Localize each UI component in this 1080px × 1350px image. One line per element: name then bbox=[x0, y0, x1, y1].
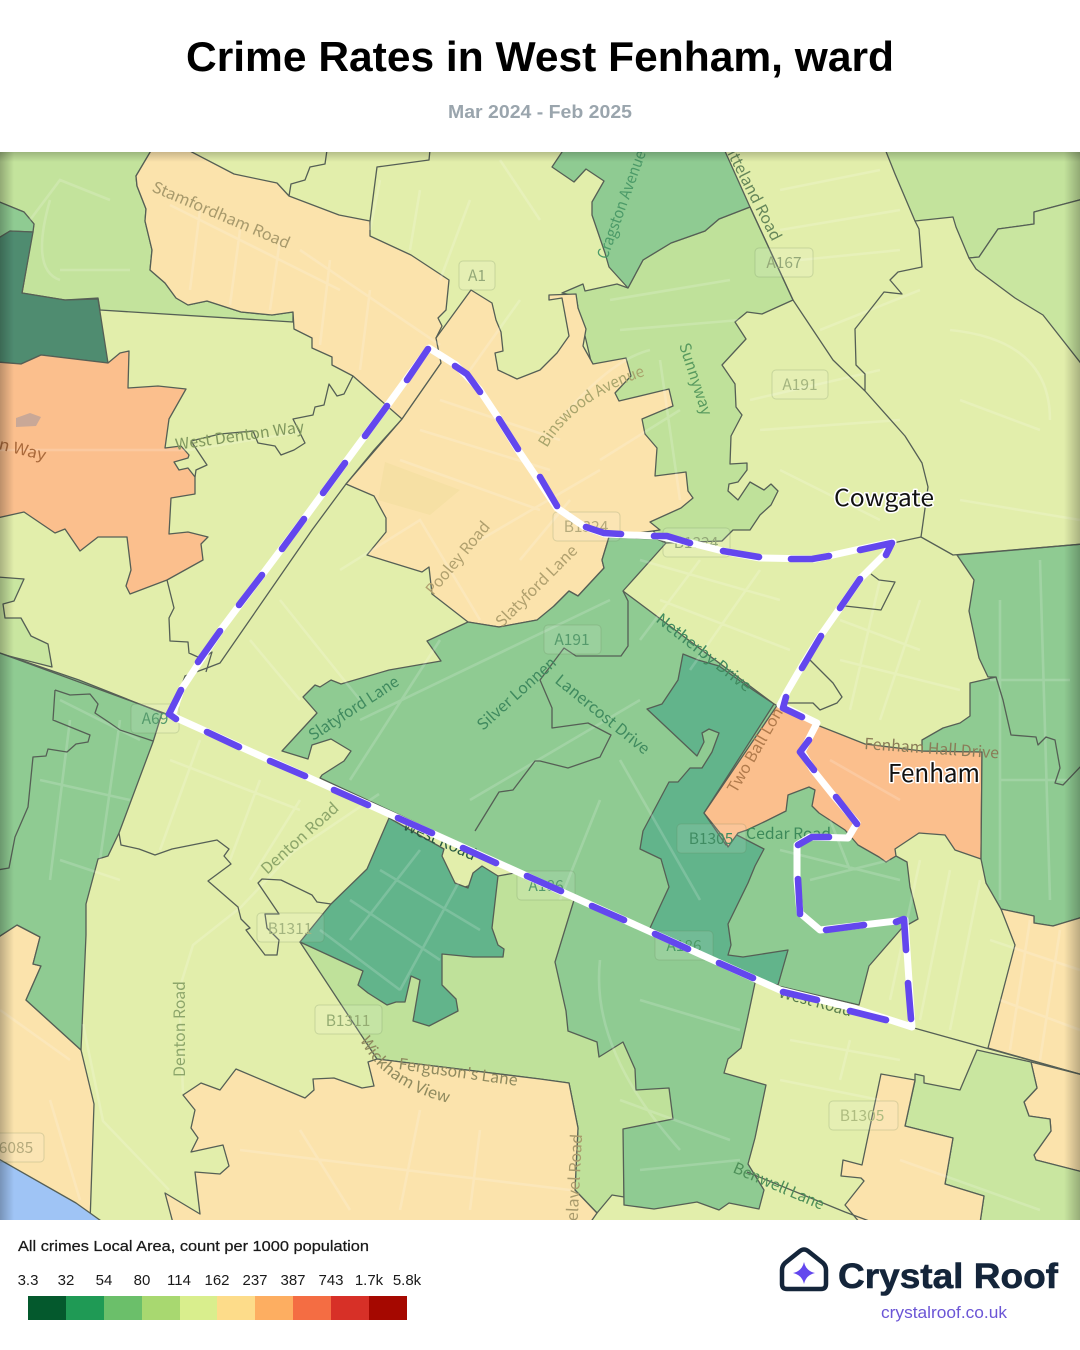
street name labels: Belavel Road bbox=[560, 1133, 587, 1232]
road shield labels: B1324 bbox=[564, 515, 609, 537]
area: Stamfordham peach bbox=[136, 149, 453, 419]
area: south-east light green bbox=[905, 1050, 1080, 1223]
legend values bbox=[18, 1272, 422, 1289]
place label: Fenham: Fenham bbox=[888, 755, 980, 790]
wordmark: Crystal Roof bbox=[838, 1257, 1058, 1296]
street name labels: Stamfordham Road bbox=[149, 175, 294, 253]
area: central peach bbox=[346, 290, 693, 627]
street name labels: West Denton Way bbox=[174, 415, 305, 455]
street name labels: Ferguson's Lane bbox=[397, 1052, 519, 1091]
road shield labels: B1305 bbox=[840, 1104, 884, 1126]
legend values: 54 bbox=[96, 1272, 112, 1289]
street name labels bbox=[0, 152, 1038, 1272]
street name labels: Pooley Road bbox=[420, 516, 495, 599]
road shield labels: B1311 bbox=[268, 917, 312, 939]
legend values: 114 bbox=[167, 1272, 191, 1289]
road shield labels: A186 bbox=[528, 874, 564, 896]
area: south-centre light green bbox=[300, 872, 680, 1213]
area: south-west peach bbox=[0, 925, 94, 1223]
area: north-east light green bbox=[885, 149, 1080, 258]
street name labels: Denton Road bbox=[256, 797, 343, 879]
area: far west mid green bbox=[0, 201, 34, 239]
area: west mid green bbox=[0, 652, 162, 1050]
road shield labels bbox=[0, 251, 884, 1158]
road shield labels: B1311 bbox=[326, 1009, 370, 1031]
area: south mid green bbox=[555, 900, 766, 1210]
legend colour scale bbox=[28, 1296, 407, 1320]
area: top centre light green bbox=[562, 207, 793, 543]
ward boundary: white line bbox=[172, 348, 912, 1027]
road shields bbox=[0, 248, 898, 1162]
area: central mid green bbox=[282, 537, 918, 1005]
area: east mid green bbox=[922, 544, 1080, 926]
subtitle: date range: Mar 2024 - Feb 2025 bbox=[448, 102, 632, 122]
street name labels: Fenham Hall Drive bbox=[864, 732, 1000, 763]
road shield labels: A191 bbox=[782, 373, 818, 395]
legend values: 162 bbox=[204, 1272, 230, 1289]
area: river water bbox=[0, 1158, 104, 1223]
road shield labels: A69 bbox=[142, 707, 168, 729]
area: south-east peach strip bbox=[988, 909, 1080, 1075]
legend values: 3.3 bbox=[18, 1272, 38, 1289]
street name labels: Sunnyway bbox=[674, 340, 718, 418]
street name labels: Slatyford Lane bbox=[304, 670, 403, 745]
road shield labels: A186 bbox=[666, 934, 702, 956]
area: Fenham orange bbox=[704, 704, 982, 862]
ward boundary: purple dashes bbox=[169, 349, 911, 1020]
street name labels: Netherby Drive bbox=[652, 608, 757, 696]
legend values: 5.8k bbox=[393, 1272, 422, 1289]
road shield labels: B1324 bbox=[674, 531, 719, 553]
place label: Cowgate: Cowgate bbox=[834, 479, 934, 513]
street name labels: West Road bbox=[777, 981, 855, 1021]
street name labels: Lanercost Drive bbox=[551, 669, 655, 759]
street name labels: West Road bbox=[400, 813, 480, 865]
road shield labels: A167 bbox=[766, 251, 802, 273]
legend values: 237 bbox=[242, 1272, 268, 1289]
road shield labels: A191 bbox=[554, 628, 590, 650]
street name labels: Slatyford Lane bbox=[490, 540, 582, 632]
area: west small light green bbox=[0, 577, 52, 667]
legend values: 80 bbox=[134, 1272, 150, 1289]
street name labels: Wickham View bbox=[361, 1034, 450, 1102]
area: south peach block bbox=[841, 1074, 984, 1223]
area: Cragston mid green bbox=[552, 149, 750, 288]
street name labels: Binswood Avenue bbox=[538, 368, 644, 447]
area: far south-east peach bbox=[1024, 1062, 1080, 1172]
area: north-east lighter green bbox=[969, 199, 1080, 366]
legend values: 1.7k bbox=[355, 1272, 384, 1289]
patch: beige field bbox=[378, 462, 460, 515]
area: darker green strip bbox=[640, 654, 788, 985]
street name labels: Cedar Road bbox=[746, 822, 831, 844]
legend title: All crimes Local Area, count per 1000 population bbox=[18, 1238, 369, 1255]
street name labels: Cragston Avenue bbox=[591, 147, 651, 262]
legend values: 743 bbox=[318, 1272, 344, 1289]
street name labels: Benwell Lane bbox=[730, 1156, 828, 1215]
legend values: 32 bbox=[58, 1272, 74, 1289]
title: Crime Rates in West Fenham, ward bbox=[186, 33, 894, 80]
area: south peach bbox=[165, 1059, 597, 1223]
patch: buildings bbox=[16, 413, 41, 427]
icon: house with star bbox=[782, 1250, 826, 1289]
area: darker green south-west bbox=[300, 818, 504, 1026]
website link text: crystalroof.co.uk bbox=[881, 1304, 1008, 1322]
outline: other boundary lines bbox=[0, 150, 1080, 1225]
map edge vignette bbox=[0, 152, 1080, 1220]
area: west orange bbox=[0, 351, 208, 594]
street name labels: Two Ball Lon bbox=[721, 703, 788, 796]
street name labels: Silver Lonnen bbox=[472, 651, 561, 735]
road shield labels: A1 bbox=[468, 264, 486, 286]
street name labels: itteland Road bbox=[723, 145, 788, 244]
logo: Crystal Roof bbox=[782, 1250, 1058, 1296]
faint street network bbox=[0, 160, 1080, 1210]
street name labels: Denton Road bbox=[168, 981, 190, 1077]
area: lowest crime dark green bbox=[0, 231, 108, 364]
area: north-west light green bbox=[0, 149, 293, 322]
legend bbox=[18, 1238, 422, 1320]
road shield labels: B1305 bbox=[689, 827, 733, 849]
legend values: 387 bbox=[280, 1272, 306, 1289]
